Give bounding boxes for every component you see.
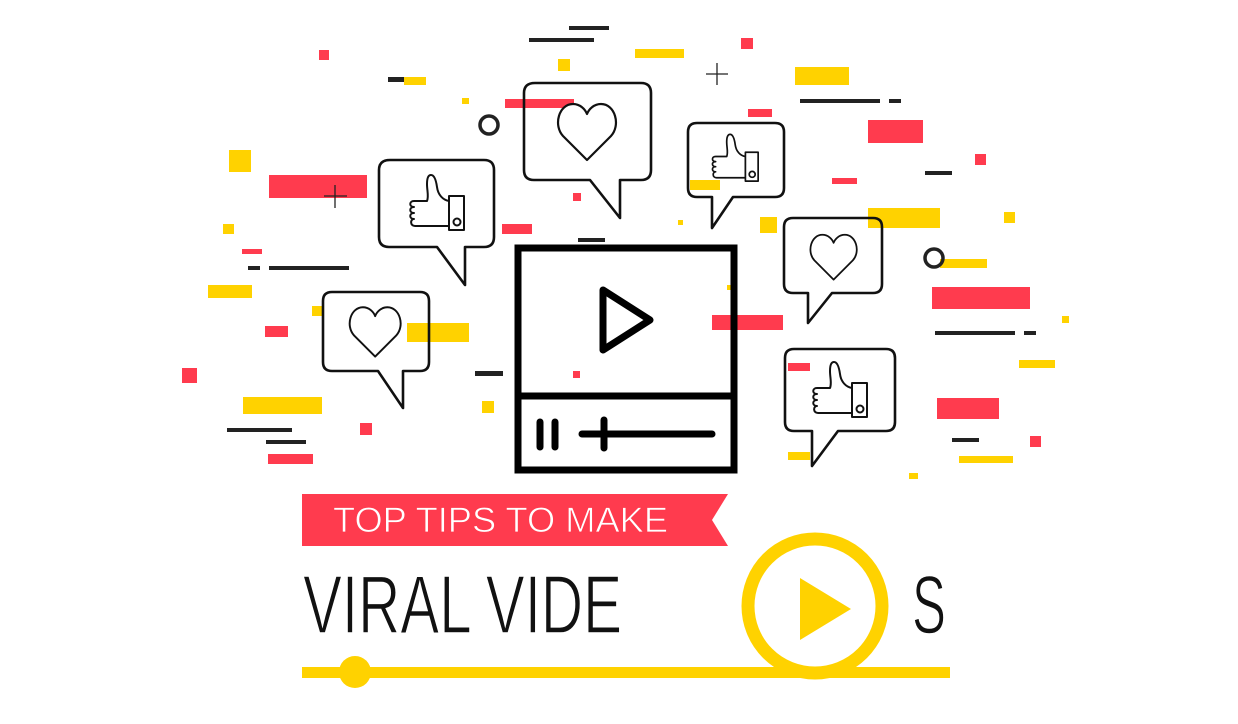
banner: top tips to make: TOP TIPS TO MAKE (333, 501, 668, 540)
bubble: thumbs up top right (688, 123, 784, 228)
bubble: heart left (323, 292, 429, 408)
icon: play outline (603, 290, 650, 350)
icon: rings (480, 116, 943, 267)
bubble: heart right (784, 218, 882, 323)
bubble: thumbs up bottom right (785, 349, 895, 466)
decorative dashes (182, 26, 1069, 479)
progress bar with big play circle (302, 539, 950, 688)
title: viral videos: VIRAL VIDE (303, 558, 622, 651)
title: viral videos (303, 558, 946, 651)
video player (518, 248, 734, 470)
title: viral videos: S (912, 558, 946, 651)
bubble: thumbs up left (379, 160, 494, 285)
bubble: heart top (524, 83, 651, 218)
icon: plus marks (324, 63, 728, 208)
pause bars and slider (540, 420, 712, 448)
banner: top tips to make (302, 494, 728, 546)
